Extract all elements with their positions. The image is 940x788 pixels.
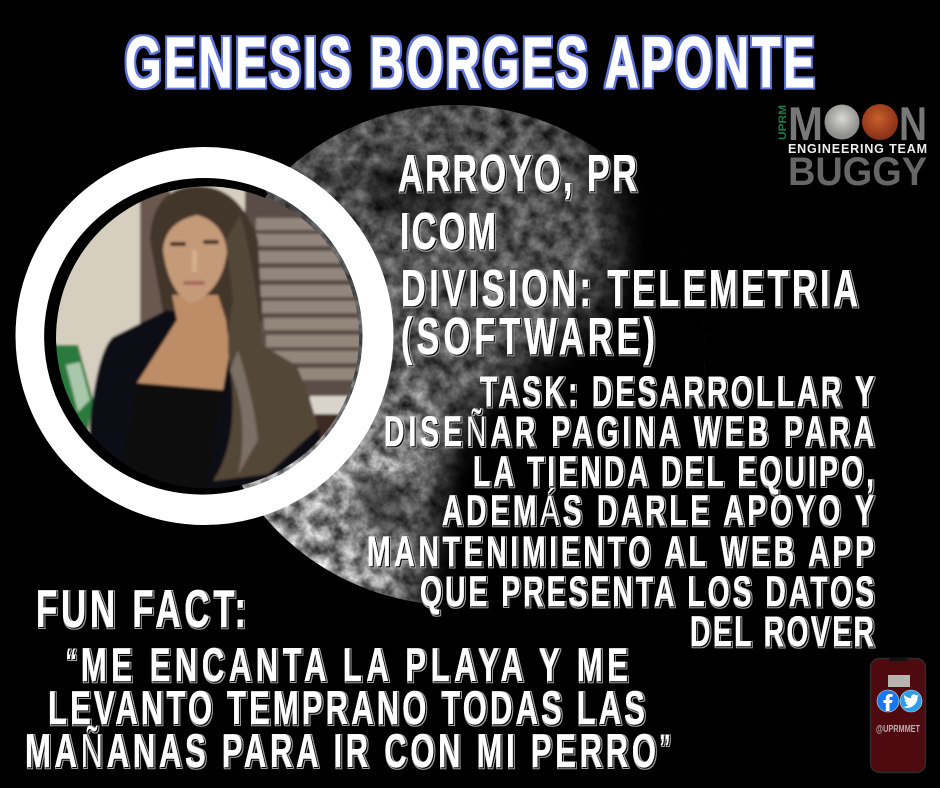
task description: LA TIENDA DEL EQUIPO, — [473, 447, 874, 495]
social media phone — [870, 658, 926, 772]
task description: DISEÑAR PAGINA WEB PARA — [384, 407, 874, 455]
moon image — [242, 105, 705, 605]
phone body — [870, 658, 926, 772]
title: GENESIS BORGES APONTE — [125, 23, 815, 102]
fun fact quote — [25, 640, 670, 778]
task description: TASK: DESARROLLAR Y — [480, 367, 874, 415]
division line 1: DIVISION: TELEMETRIA — [401, 260, 858, 318]
icon: twitter — [900, 690, 922, 712]
fun fact quote: MAÑANAS PARA IR CON MI PERRO” — [25, 725, 670, 778]
logo: engineering team: ENGINEERING TEAM — [788, 142, 927, 156]
division line 2: (SOFTWARE) — [401, 308, 655, 366]
logo: M: M — [788, 97, 823, 150]
logo: moon — [824, 104, 860, 140]
task description: DEL ROVER — [690, 607, 874, 655]
hometown: ARROYO, PR — [398, 145, 637, 203]
small logo — [888, 675, 910, 687]
team logo — [777, 97, 927, 194]
fun fact quote: “ME ENCANTA LA PLAYA Y ME — [66, 640, 628, 692]
task description: MANTENIMIENTO AL WEB APP — [367, 527, 874, 575]
handle: @UPRMMET — [876, 724, 920, 735]
program: ICOM — [400, 203, 496, 261]
division — [401, 260, 858, 366]
task description — [367, 367, 874, 655]
fun fact quote: LEVANTO TEMPRANO TODAS LAS — [48, 683, 645, 735]
white ring around photo — [31, 162, 378, 510]
phone notch — [889, 658, 907, 661]
logo: mars — [862, 104, 898, 140]
task description: ADEMÁS DARLE APOYO Y — [442, 486, 874, 534]
fun fact heading: FUN FACT: — [36, 579, 246, 639]
logo: UPRM: UPRM — [777, 105, 789, 140]
portrait photo — [56, 186, 359, 488]
logo: buggy: BUGGY — [788, 150, 927, 194]
icon: facebook — [877, 690, 899, 712]
task description: QUE PRESENTA LOS DATOS — [420, 567, 874, 615]
logo: N: N — [899, 97, 927, 150]
black inner ring — [44, 179, 268, 495]
